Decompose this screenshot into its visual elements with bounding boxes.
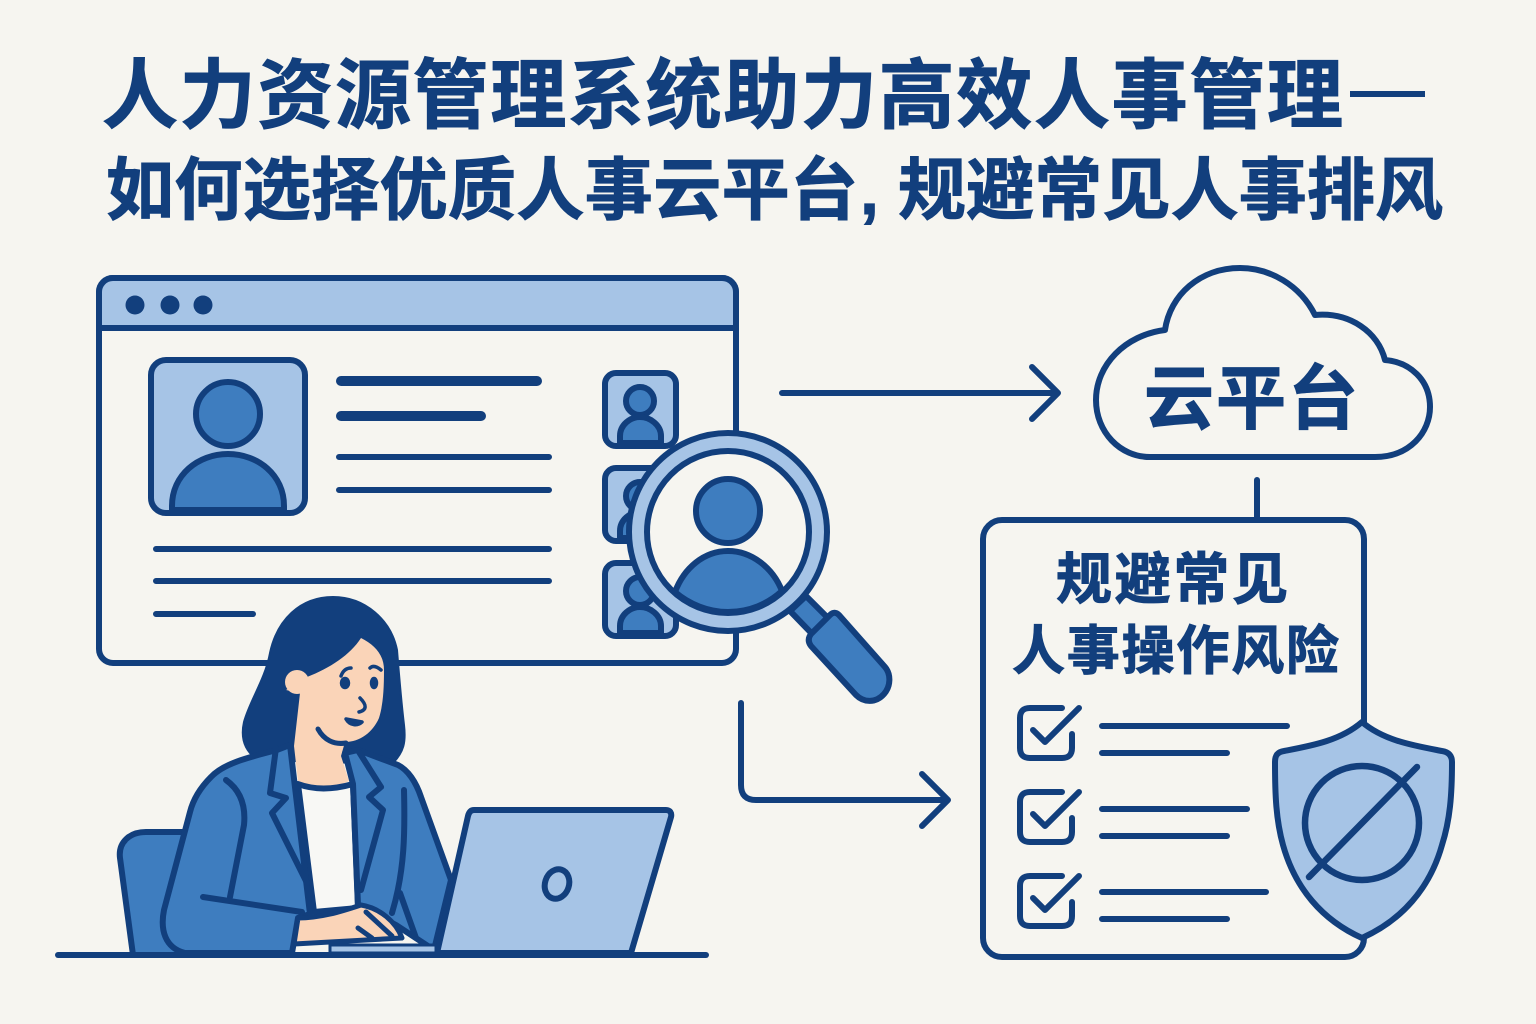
subtitle — [106, 153, 1443, 229]
shirt — [298, 784, 358, 912]
checklist heading: 规避常见 — [1056, 548, 1288, 611]
subtitle: 规避常见人事排风 — [898, 153, 1443, 229]
profile text lines — [156, 381, 549, 614]
desk line — [58, 952, 706, 958]
icon: cloud platform: 云平台 — [1144, 360, 1358, 438]
checklist heading — [1012, 548, 1339, 681]
keyboard — [330, 945, 436, 953]
blazer — [163, 745, 451, 953]
candidate thumbnails — [605, 373, 676, 636]
eyes, brows, nose and mouth — [341, 666, 381, 725]
chair — [120, 832, 190, 955]
panel: browser window — [99, 278, 736, 663]
window control dots — [126, 296, 212, 314]
checklist heading: 人事操作风险 — [1012, 622, 1339, 681]
neck and face — [285, 638, 384, 787]
profile photo card — [151, 360, 305, 513]
icon: magnifying glass — [629, 433, 889, 701]
arrow: to cloud platform — [782, 367, 1058, 419]
connector: cloud to checklist — [1254, 480, 1260, 520]
illustration: woman at laptop — [120, 597, 671, 955]
arrow: to checklist — [741, 703, 948, 826]
hair — [243, 597, 405, 764]
hand — [294, 905, 402, 944]
laptop — [437, 810, 671, 953]
checklist items — [1020, 708, 1287, 926]
subtitle: , — [860, 153, 879, 229]
icon: cloud platform — [1096, 268, 1430, 457]
panel: risk checklist — [983, 520, 1364, 957]
title: 人力资源管理系统助力高效人事管理 — [102, 54, 1343, 139]
window title bar — [99, 278, 736, 328]
subtitle: 如何选择优质人事云平台 — [106, 153, 858, 229]
icon: shield — [1275, 722, 1452, 938]
